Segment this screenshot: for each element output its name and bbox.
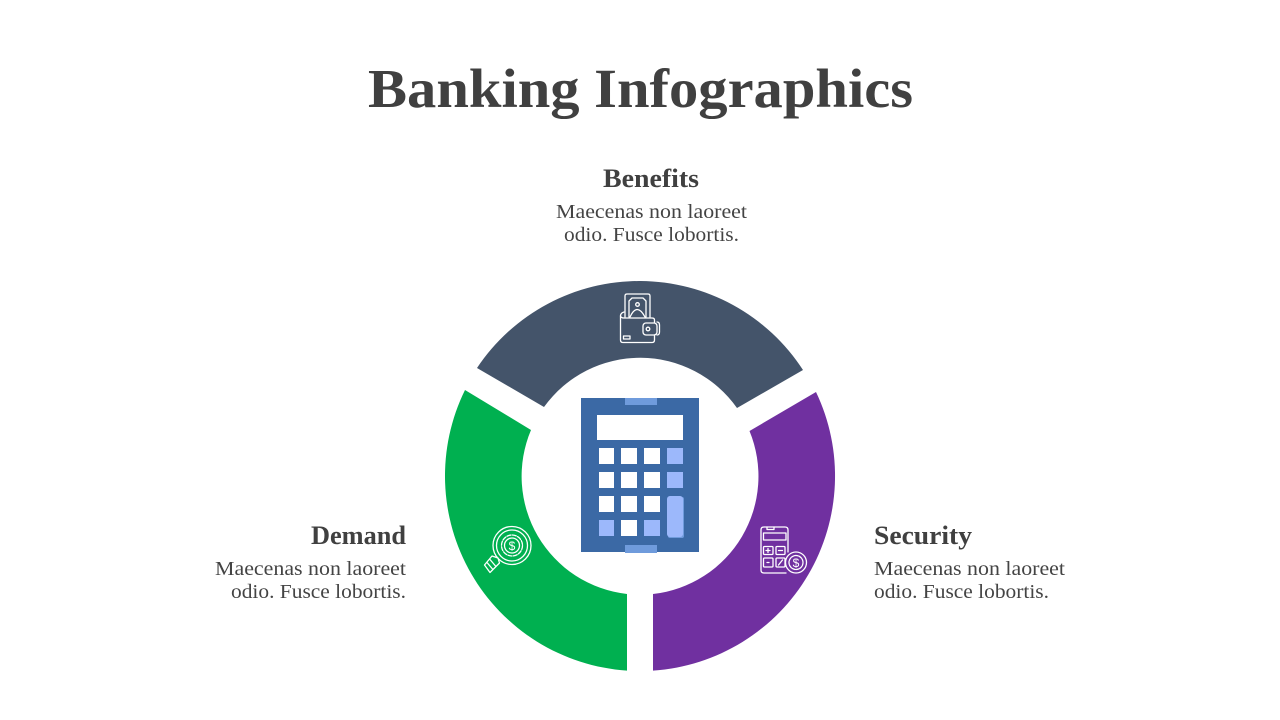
calculator bottom tab xyxy=(625,545,657,553)
demand heading: Demand xyxy=(311,521,407,550)
benefits text block xyxy=(556,164,747,246)
security heading: Security xyxy=(874,521,972,550)
calculator body xyxy=(581,398,699,552)
ring segment: benefits xyxy=(477,281,803,408)
demand text block: odio. Fusce lobortis. xyxy=(231,581,406,603)
ring segment: security xyxy=(653,392,835,671)
calculator keys xyxy=(599,448,684,538)
security text block xyxy=(874,521,1065,603)
icon: phone calculator with coin: $ xyxy=(793,556,800,570)
demand text block xyxy=(215,521,407,603)
security text block: odio. Fusce lobortis. xyxy=(874,581,1049,603)
security body: Maecenas non laoreet xyxy=(874,558,1065,580)
calculator top tab xyxy=(625,398,657,405)
icon: central calculator xyxy=(581,398,699,553)
ring segment: demand xyxy=(445,390,627,671)
title: Banking Infographics xyxy=(368,58,913,119)
calculator screen xyxy=(597,415,683,440)
icon: phone calculator with coin xyxy=(761,527,806,573)
benefits heading: Benefits xyxy=(603,164,699,193)
icon: magnifier with dollar: $ xyxy=(509,539,516,553)
benefits text block: odio. Fusce lobortis. xyxy=(564,224,739,246)
benefits body: Maecenas non laoreet xyxy=(556,201,747,223)
icon: wallet with banknote xyxy=(620,294,660,342)
icon: magnifier with dollar xyxy=(484,526,531,572)
demand body: Maecenas non laoreet xyxy=(215,558,406,580)
